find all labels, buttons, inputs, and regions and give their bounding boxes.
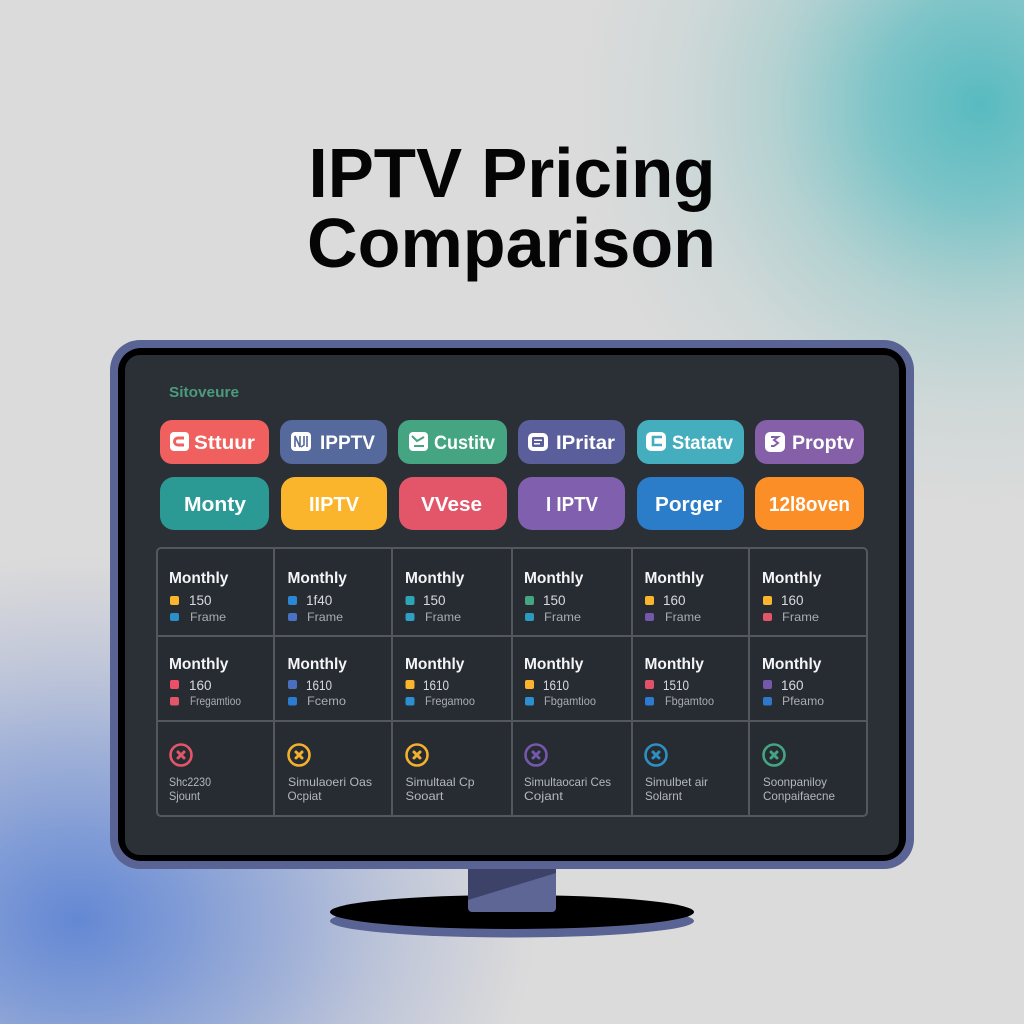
button: Custitv: Custitv bbox=[434, 433, 495, 454]
cell 6 bbox=[762, 570, 822, 624]
cell 6 bbox=[763, 744, 835, 803]
cell 1: Shc2230 bbox=[169, 775, 211, 789]
cell 1: Sjount bbox=[169, 789, 201, 803]
cell 5: Monthly bbox=[644, 656, 704, 673]
cell 3: Sooart bbox=[406, 789, 444, 803]
cell 3: Fregamoo bbox=[425, 694, 475, 708]
cell 4 bbox=[524, 656, 596, 708]
cell 5: 1510 bbox=[663, 678, 689, 693]
button: Proptv: Proptv bbox=[792, 433, 854, 454]
button: Monty: Monty bbox=[184, 494, 247, 516]
title bbox=[307, 134, 716, 282]
cell 1: Frame bbox=[190, 610, 226, 624]
cell 4 bbox=[524, 570, 584, 624]
button: Proptv bbox=[755, 420, 864, 464]
cell 3 bbox=[405, 570, 465, 624]
stand base bbox=[330, 895, 694, 938]
cell 6: 160 bbox=[781, 593, 804, 608]
cell 4: Monthly bbox=[524, 570, 584, 587]
cell 2 bbox=[288, 744, 372, 803]
button: I IPTV: I IPTV bbox=[546, 494, 599, 516]
cell 3: Monthly bbox=[405, 570, 465, 587]
cell 1: Monthly bbox=[169, 656, 229, 673]
provider buttons row 2 bbox=[160, 477, 864, 530]
cell 5 bbox=[644, 570, 704, 624]
cell 2: 1610 bbox=[306, 678, 332, 693]
cell 6: Pfeamo bbox=[782, 694, 824, 708]
cell 2: 1f40 bbox=[306, 593, 332, 608]
cell 2: Fcemo bbox=[307, 694, 346, 708]
cell 6: Monthly bbox=[762, 656, 822, 673]
cell 1: Fregamtioo bbox=[190, 694, 241, 708]
button: Porger: Porger bbox=[655, 494, 722, 516]
cell 2: Ocpiat bbox=[288, 789, 322, 803]
cell 6: Frame bbox=[782, 610, 819, 624]
cell 4 bbox=[524, 744, 611, 803]
cell 6: 160 bbox=[781, 678, 804, 693]
button: I IPTV bbox=[518, 477, 625, 530]
cell 1: 150 bbox=[189, 593, 212, 608]
monitor stand bbox=[330, 868, 694, 938]
provider buttons row 1 bbox=[160, 420, 864, 464]
cell 6: Conpaifaecne bbox=[763, 789, 835, 803]
cell 1 bbox=[169, 570, 229, 624]
button: Custitv bbox=[398, 420, 507, 464]
cell 2 bbox=[288, 570, 347, 624]
button: 12l8oven bbox=[755, 477, 864, 530]
cell 5: Fbgamtoo bbox=[665, 694, 714, 708]
cell 4: 1610 bbox=[543, 678, 569, 693]
cell 2: Monthly bbox=[288, 656, 347, 673]
monitor bbox=[110, 340, 914, 869]
cell 6 bbox=[762, 656, 824, 708]
cell 2: Frame bbox=[307, 610, 343, 624]
button: Statatv bbox=[637, 420, 744, 464]
button: IIPTV bbox=[281, 477, 387, 530]
button: Sttuur bbox=[160, 420, 269, 464]
cell 2 bbox=[288, 656, 347, 708]
pricing row 2 bbox=[169, 656, 824, 708]
cell 5: Simulbet air bbox=[645, 775, 708, 789]
cell 4: Simultaocari Ces bbox=[524, 775, 611, 789]
cell 3: 150 bbox=[423, 593, 446, 608]
cell 5: Frame bbox=[665, 610, 701, 624]
cell 1 bbox=[169, 744, 211, 803]
stand neck bbox=[468, 868, 556, 912]
cell 3 bbox=[406, 744, 475, 803]
cell 4: Monthly bbox=[524, 656, 584, 673]
feature row bbox=[169, 744, 835, 803]
button: IPritar bbox=[518, 420, 625, 464]
button: 12l8oven: 12l8oven bbox=[769, 494, 850, 516]
button: Porger bbox=[637, 477, 744, 530]
cell 3 bbox=[405, 656, 475, 708]
button: VVese bbox=[399, 477, 507, 530]
cell 3: Frame bbox=[425, 610, 461, 624]
cell 5: 160 bbox=[663, 593, 686, 608]
cell 2: Simulaoeri Oas bbox=[288, 775, 372, 789]
cell 5 bbox=[644, 656, 714, 708]
screen heading: Sitoveure bbox=[169, 385, 239, 401]
cell 3: 1610 bbox=[423, 678, 449, 693]
title: IPTV Pricing bbox=[308, 134, 716, 212]
button: IIPTV: IIPTV bbox=[309, 494, 360, 516]
cell 6: Soonpaniloy bbox=[763, 775, 827, 789]
button: Monty bbox=[160, 477, 269, 530]
cell 4: 150 bbox=[543, 593, 566, 608]
cell 5: Monthly bbox=[644, 570, 704, 587]
cell 4: Cojant bbox=[524, 789, 564, 803]
cell 2: Monthly bbox=[288, 570, 347, 587]
cell 5 bbox=[645, 744, 708, 803]
title: Comparison bbox=[307, 204, 716, 282]
button: IPPTV: IPPTV bbox=[320, 433, 375, 454]
cell 1: 160 bbox=[189, 678, 212, 693]
button: IPPTV bbox=[280, 420, 387, 464]
cell 4: Fbgamtioo bbox=[544, 694, 596, 708]
button: VVese: VVese bbox=[421, 494, 482, 516]
cell 1: Monthly bbox=[169, 570, 229, 587]
cell 1 bbox=[169, 656, 241, 708]
comparison table bbox=[157, 548, 867, 816]
button: IPritar: IPritar bbox=[556, 433, 616, 454]
button: Statatv: Statatv bbox=[672, 433, 733, 454]
cell 4: Frame bbox=[544, 610, 581, 624]
cell 3: Monthly bbox=[405, 656, 465, 673]
button: Sttuur: Sttuur bbox=[194, 433, 256, 454]
cell 3: Simultaal Cp bbox=[406, 775, 475, 789]
cell 5: Solarnt bbox=[645, 789, 683, 803]
pricing row 1 bbox=[169, 570, 822, 624]
cell 6: Monthly bbox=[762, 570, 822, 587]
table grid bbox=[157, 548, 867, 816]
